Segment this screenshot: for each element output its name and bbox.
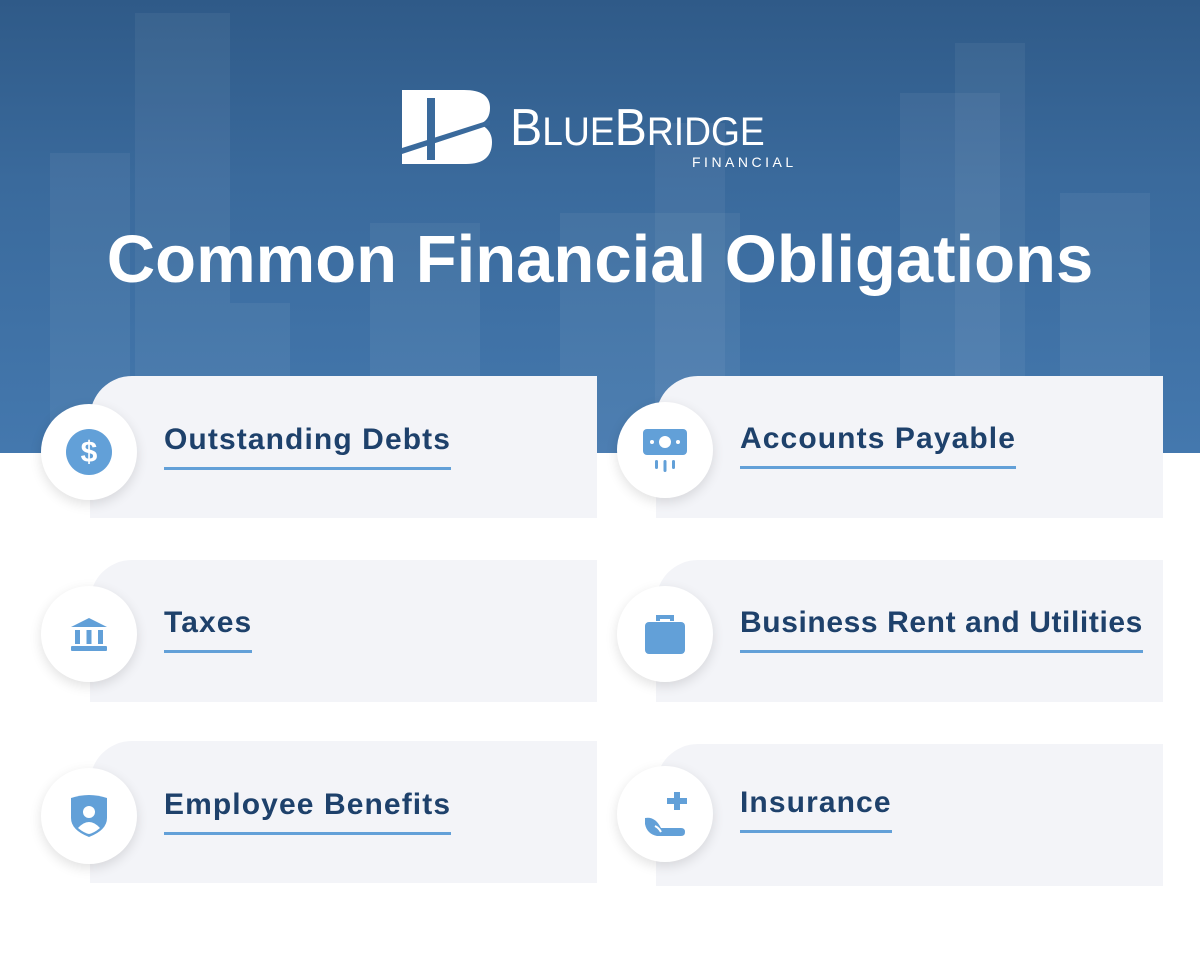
header background bbox=[0, 0, 1200, 453]
brand name: BLUEBRIDGE bbox=[510, 99, 765, 157]
icon: bank bbox=[41, 586, 137, 682]
logo bbox=[402, 90, 797, 170]
icon: dollar bbox=[41, 404, 137, 500]
title: Common Financial Obligations bbox=[107, 222, 1093, 297]
icon: hand with cross bbox=[617, 766, 713, 862]
icon: briefcase bbox=[617, 586, 713, 682]
icon: shield person bbox=[41, 768, 137, 864]
card: Taxes bbox=[38, 560, 597, 702]
card: Insurance bbox=[614, 744, 1163, 886]
logo: FINANCIAL bbox=[692, 154, 797, 170]
icon: dollar: $ bbox=[81, 436, 98, 469]
card: Insurance: Insurance bbox=[740, 786, 892, 819]
icon: logo mark bbox=[402, 90, 492, 164]
card: Employee Benefits: Employee Benefits bbox=[164, 788, 451, 821]
card: Business Rent and Utilities bbox=[614, 560, 1163, 702]
card: Employee Benefits bbox=[38, 741, 597, 883]
card: Accounts Payable bbox=[614, 376, 1163, 518]
icon: money bbox=[617, 402, 713, 498]
card: Outstanding Debts: Outstanding Debts bbox=[164, 423, 451, 456]
card: Taxes: Taxes bbox=[164, 606, 252, 639]
card: Accounts Payable: Accounts Payable bbox=[740, 422, 1016, 455]
card: Business Rent and Utilities: Business Rent and Utilities bbox=[740, 606, 1143, 639]
card: Outstanding Debts bbox=[38, 376, 597, 518]
